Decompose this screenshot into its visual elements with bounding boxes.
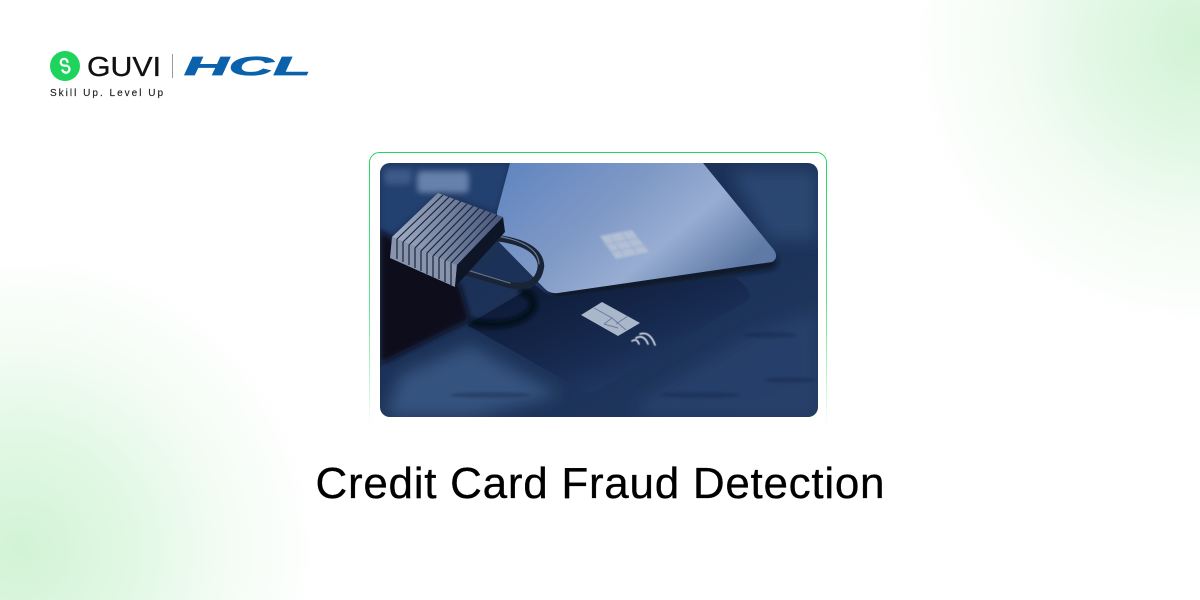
icon: GUVI green circle [50, 51, 80, 81]
shackle reflection [470, 290, 534, 324]
icon: contactless waves [632, 333, 655, 345]
title: Credit Card Fraud Detection [316, 459, 884, 508]
lower card [468, 278, 748, 372]
dark table surface [380, 163, 818, 417]
lighter table patches [385, 170, 818, 417]
blurred background card [380, 163, 510, 235]
lower card chip [581, 302, 640, 336]
upper card shadow [545, 258, 778, 300]
padlock ribs [397, 195, 497, 285]
background glow: top right [880, 0, 1200, 340]
tagline: Skill Up. Level Up [50, 88, 163, 99]
padlock shackle [465, 236, 541, 286]
logo divider [172, 54, 173, 78]
padlock body [390, 193, 505, 287]
table texture [450, 332, 816, 398]
GUVI wordmark: GUVI [87, 51, 161, 82]
logo lockup [50, 51, 311, 99]
image frame [370, 152, 826, 428]
background glow: bottom left [0, 240, 345, 600]
photo: padlock on credit cards [380, 163, 818, 417]
dark left shadow area [380, 230, 470, 362]
HCL wordmark: HCL [184, 51, 311, 81]
upper card chip [600, 230, 649, 259]
upper card [497, 163, 776, 293]
